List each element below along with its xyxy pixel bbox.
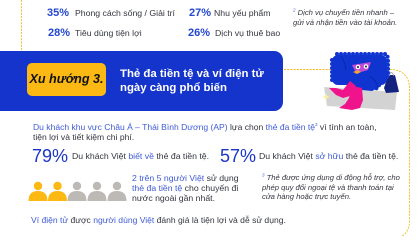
stat: lifestyle 35%: 35% — [47, 7, 69, 19]
icon row: 2 of 5 people — [28, 182, 126, 201]
footnote 3: cửa hàng hoặc trực tuyến. — [262, 192, 351, 201]
stat: convenience 28%: 28% — [48, 27, 70, 39]
closing sentence: e-wallets: Ví điện tử được người dùng Việt đánh giá là tiện lợi và dễ sử dụng. — [31, 215, 286, 225]
footnote 2 — [293, 7, 397, 26]
stat: 79% aware: 79% — [32, 146, 68, 166]
banner heading — [120, 68, 264, 94]
footnote 2: gửi và nhận tiền vào tài khoản. — [293, 18, 397, 26]
illustration: blue furry character on bench — [322, 52, 399, 110]
stat: 57% own: 57% — [220, 146, 256, 166]
stat: 57% own — [220, 146, 398, 166]
stat: subscriptions 26% — [188, 27, 280, 39]
stat: cosmetics 27%: Nhu yếu phẩm — [214, 8, 271, 18]
badge: trend number — [27, 63, 106, 96]
footnote 3: 3 Thẻ được ứng dụng di động hỗ trợ, cho — [262, 172, 400, 182]
footnote 2: 2 Dịch vụ chuyển tiền nhanh – — [293, 7, 394, 17]
stat: 79% aware — [32, 146, 209, 166]
intro paragraph — [33, 122, 376, 142]
stat: 57% own: Du khách Việt sở hữu thẻ đa tiền tệ. — [259, 151, 398, 161]
text: 2 of 5 Vietnamese: 2 trên 5 người Việt sử dụng — [132, 173, 239, 183]
stat: subscriptions 26%: Dịch vụ thuê bao — [215, 28, 280, 38]
stat: cosmetics 27%: 27% — [189, 7, 211, 19]
banner heading: Thẻ đa tiền tệ và ví điện tử — [120, 68, 264, 80]
stat: lifestyle 35%: Phong cách sống / Giải trí — [75, 8, 175, 18]
stat: lifestyle 35% — [47, 7, 175, 19]
intro paragraph: Du khách khu vực Châu Á – Thái Bình Dương (AP) lựa chọn thẻ đa tiền tệ3 vì tính an toàn, — [33, 122, 376, 132]
text: 2 of 5 Vietnamese: nước ngoài gần nhất. — [132, 193, 215, 203]
text: 2 of 5 Vietnamese: thẻ đa tiền tệ cho chuyến đi — [132, 183, 238, 193]
banner: trend 3 — [0, 51, 283, 111]
stat: cosmetics 27% — [189, 7, 271, 19]
stat: 79% aware: Du khách Việt biết về thẻ đa tiền tệ. — [72, 151, 209, 161]
stat: convenience 28%: Tiêu dùng tiện lợi — [75, 28, 142, 38]
footnote 3: phép quy đổi ngoại tệ và thanh toán tại — [262, 182, 394, 192]
stat: convenience 28% — [48, 27, 142, 39]
text: 2 of 5 Vietnamese — [132, 173, 239, 203]
footnote 3 — [262, 172, 400, 201]
intro paragraph: tiện lợi và tiết kiệm chi phí. — [33, 132, 134, 142]
stat: subscriptions 26%: 26% — [188, 27, 210, 39]
badge: trend number: Xu hướng 3. — [29, 72, 104, 86]
banner heading: ngày càng phổ biến — [120, 82, 227, 94]
